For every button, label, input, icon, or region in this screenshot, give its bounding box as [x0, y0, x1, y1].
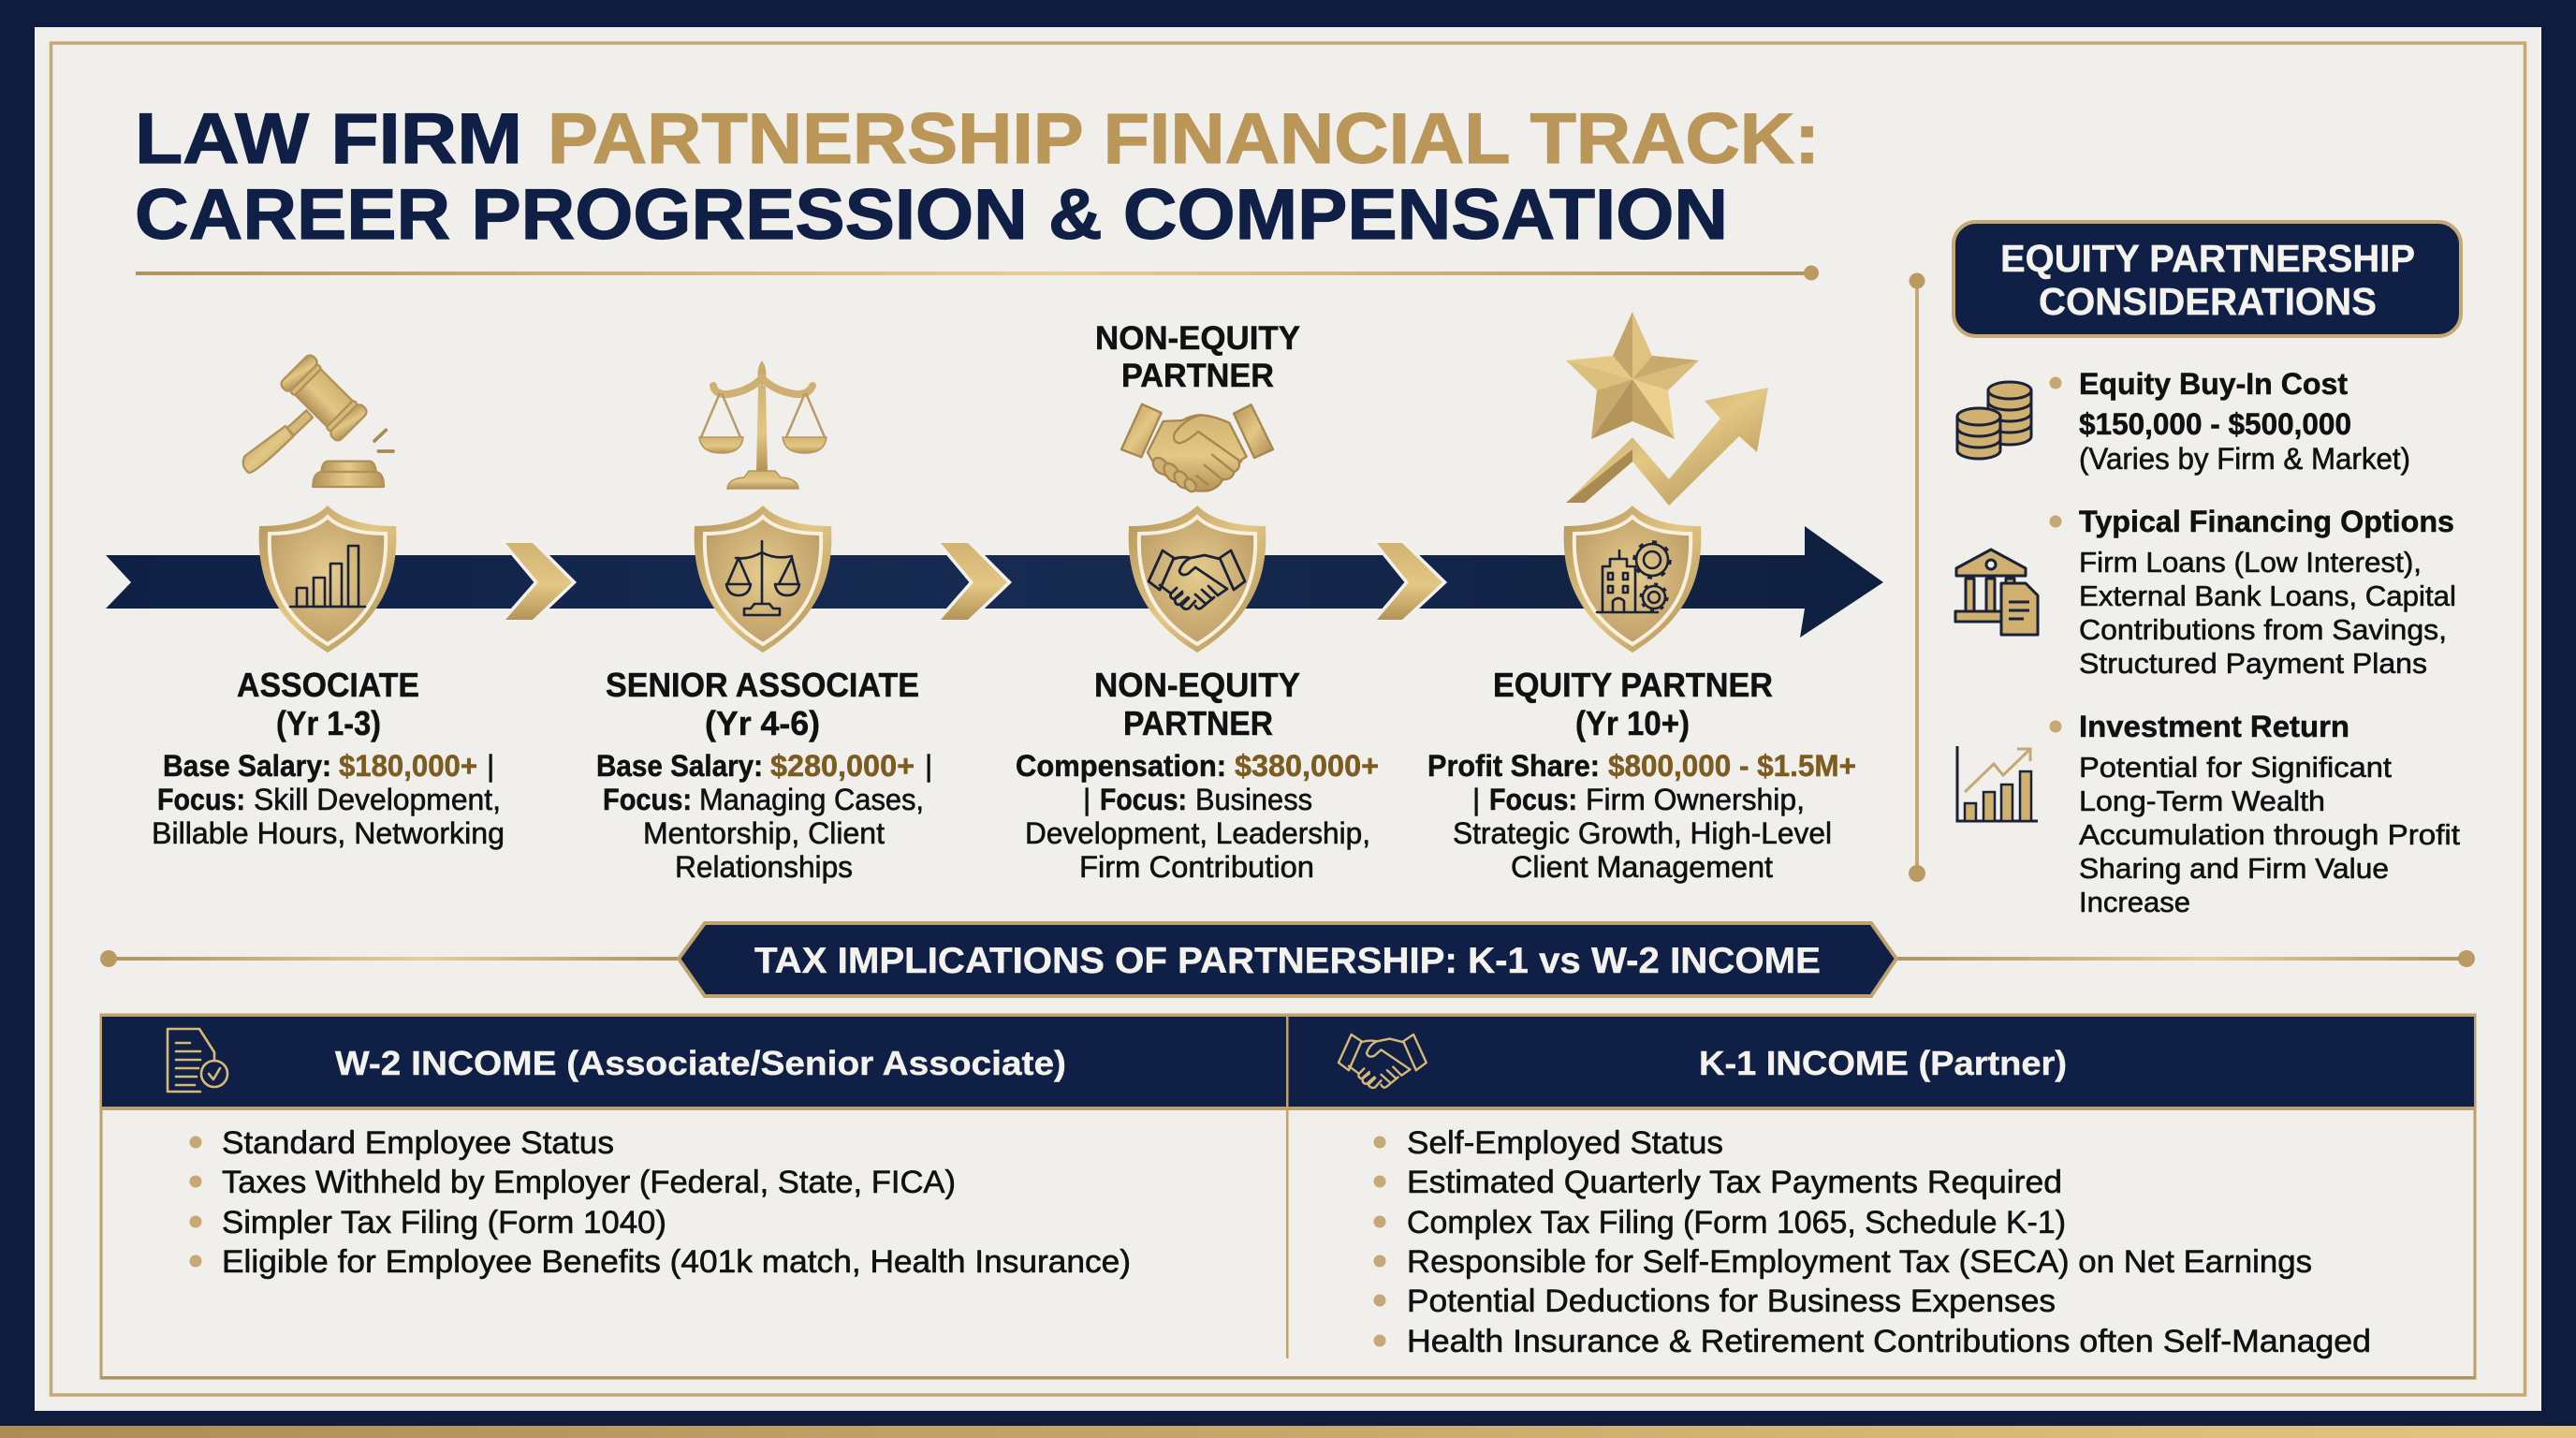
label: non-equity partner: Focus: — [1100, 783, 1187, 816]
label: senior associate: | — [925, 749, 932, 783]
label: non-equity partner: | — [1083, 783, 1090, 816]
item: equity buy-in cost: (Varies by Firm & Market) — [2079, 442, 2410, 476]
item: investment return: Accumulation through Profit — [2079, 818, 2460, 851]
label: equity partner: $800,000 - $1.5M+ — [1608, 749, 1856, 783]
title: LAW FIRM — [135, 99, 522, 179]
item: investment return: Increase — [2079, 886, 2190, 918]
panel: equity partnership considerations — [1909, 222, 2461, 918]
item: typical financing options: Contributions from Savings, — [2079, 613, 2447, 646]
list: k-1 income: Self-Employed Status — [1407, 1125, 1723, 1161]
label: associate: Focus: — [157, 783, 245, 816]
arrow band — [106, 526, 1883, 638]
label: senior associate — [596, 666, 932, 884]
stage: non-equity partner — [1016, 320, 1379, 884]
label: senior associate: Managing Cases, — [699, 783, 924, 816]
icon: star — [1566, 312, 1699, 439]
label: senior associate: Mentorship, Client — [643, 816, 885, 850]
stage: associate — [152, 353, 505, 850]
label: associate: Base Salary: — [163, 749, 331, 783]
label: equity partner: | — [1472, 783, 1480, 816]
heading: non-equity partner top label: NON-EQUITY — [1095, 320, 1300, 357]
label: associate: $180,000+ — [339, 749, 477, 783]
label: senior associate: (Yr 4-6) — [705, 704, 820, 742]
item: investment return: Potential for Significant — [2079, 751, 2392, 784]
item: typical financing options — [2050, 505, 2456, 680]
column heading: k-1 income: K-1 INCOME (Partner) — [1699, 1044, 2067, 1082]
chevron 1 — [505, 543, 572, 620]
icon: coin stacks — [1957, 382, 2031, 459]
label: associate: ASSOCIATE — [237, 666, 419, 704]
label: equity partner: (Yr 10+) — [1575, 704, 1690, 742]
title — [135, 99, 1820, 255]
item: equity buy-in cost — [2050, 367, 2410, 476]
label: senior associate: Base Salary: — [596, 749, 763, 783]
vertical connector — [1909, 273, 1925, 882]
tax section banner: TAX IMPLICATIONS OF PARTNERSHIP: K-1 vs W-2 INCOME — [754, 941, 1821, 981]
list: k-1 income: Responsible for Self-Employment Tax (SECA) on Net Earnings — [1407, 1244, 2312, 1280]
item: typical financing options: Structured Payment Plans — [2079, 647, 2427, 680]
list: k-1 income: Health Insurance & Retirement Contributions often Self-Managed — [1407, 1324, 2371, 1359]
icon: rising arrow — [1566, 388, 1768, 506]
list: w-2 income: Standard Employee Status — [222, 1125, 614, 1161]
column heading: w-2 income: W-2 INCOME (Associate/Senior Associate) — [335, 1044, 1066, 1082]
label: senior associate: Focus: — [603, 783, 692, 816]
list: k-1 income: Estimated Quarterly Tax Payments Required — [1407, 1165, 2062, 1200]
list: k-1 income: Complex Tax Filing (Form 1065, Schedule K-1) — [1407, 1205, 2066, 1240]
label: associate: Billable Hours, Networking — [152, 816, 505, 850]
icon: gold handshake — [1121, 404, 1273, 493]
stage: senior associate — [596, 360, 932, 884]
list: w-2 income: Taxes Withheld by Employer (Federal, State, FICA) — [222, 1165, 956, 1200]
label: non-equity partner: Compensation: — [1016, 749, 1226, 783]
label: equity partner: Client Management — [1511, 850, 1773, 884]
label: associate — [152, 666, 505, 850]
icon: growth chart — [1957, 746, 2038, 821]
list: w-2 income: Eligible for Employee Benefits (401k match, Health Insurance) — [222, 1244, 1131, 1280]
item: typical financing options: External Bank Loans, Capital — [2079, 580, 2456, 612]
label: equity partner: Firm Ownership, — [1586, 783, 1805, 816]
tax section banner — [679, 923, 1896, 996]
item: typical financing options: Typical Financing Options — [2079, 505, 2454, 538]
label: equity partner: Focus: — [1489, 783, 1577, 816]
chevron 3 — [1377, 543, 1442, 620]
comparison table — [101, 1014, 2475, 1380]
item: investment return — [2050, 710, 2460, 918]
label: non-equity partner: $380,000+ — [1235, 749, 1379, 783]
list: w-2 income — [189, 1125, 1131, 1280]
icon: scales of justice — [699, 360, 827, 489]
career timeline arrow — [106, 526, 1883, 638]
chevron 2 — [941, 543, 1007, 620]
label: non-equity partner — [1016, 666, 1379, 884]
label: senior associate: Relationships — [675, 850, 853, 884]
item: equity buy-in cost: Equity Buy-In Cost — [2079, 367, 2348, 401]
shield: handshake — [1129, 506, 1266, 653]
heading: non-equity partner top label: PARTNER — [1121, 358, 1274, 394]
list: k-1 income: Potential Deductions for Business Expenses — [1407, 1284, 2056, 1319]
panel heading: CONSIDERATIONS — [2039, 280, 2377, 323]
table frame — [101, 1014, 2475, 1380]
panel heading: EQUITY PARTNERSHIP — [2000, 237, 2415, 280]
shield: scales — [695, 506, 831, 653]
label: equity partner: EQUITY PARTNER — [1493, 666, 1773, 704]
list: w-2 income: Simpler Tax Filing (Form 1040) — [222, 1205, 666, 1240]
shield: bar chart — [259, 506, 396, 653]
label: equity partner — [1427, 666, 1856, 884]
label: senior associate: $280,000+ — [770, 749, 915, 783]
label: non-equity partner: Business — [1195, 783, 1312, 816]
title: PARTNERSHIP FINANCIAL TRACK: — [548, 99, 1820, 179]
section divider lines — [100, 950, 2475, 967]
item: investment return: Long-Term Wealth — [2079, 785, 2325, 817]
label: equity partner: Profit Share: — [1427, 749, 1600, 783]
label: non-equity partner: NON-EQUITY — [1094, 666, 1300, 704]
label: non-equity partner: PARTNER — [1123, 704, 1273, 742]
panel heading — [1954, 222, 2461, 336]
icon: tax form — [168, 1029, 227, 1092]
label: senior associate: SENIOR ASSOCIATE — [606, 666, 919, 704]
label: associate: | — [487, 749, 494, 783]
label: associate: (Yr 1-3) — [276, 704, 381, 742]
heading: non-equity partner top label — [1095, 320, 1300, 394]
title rule — [136, 266, 1819, 281]
item: investment return: Investment Return — [2079, 710, 2349, 743]
item: typical financing options: Firm Loans (Low Interest), — [2079, 546, 2422, 579]
icon: outline handshake — [1339, 1034, 1427, 1088]
list: k-1 income — [1374, 1125, 2371, 1359]
icon: gavel — [243, 353, 393, 487]
icon: bank and document — [1955, 550, 2038, 635]
title: CAREER PROGRESSION & COMPENSATION — [135, 175, 1728, 255]
item: equity buy-in cost: $150,000 - $500,000 — [2079, 407, 2351, 441]
label: equity partner: Strategic Growth, High-Level — [1453, 816, 1832, 850]
shield: building and gears — [1564, 506, 1701, 653]
label: non-equity partner: Development, Leadership, — [1025, 816, 1370, 850]
label: associate: Skill Development, — [254, 783, 501, 816]
stage: equity partner — [1427, 312, 1856, 884]
label: non-equity partner: Firm Contribution — [1079, 850, 1314, 884]
item: investment return: Sharing and Firm Value — [2079, 852, 2389, 885]
